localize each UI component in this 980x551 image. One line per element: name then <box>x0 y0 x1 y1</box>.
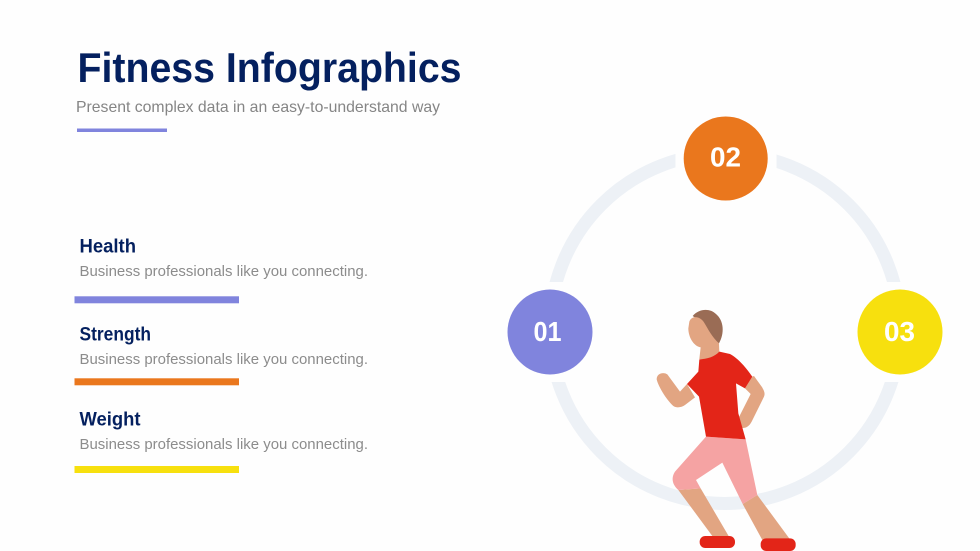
runner figure <box>657 310 796 551</box>
description: health: Business professionals like you connecting. <box>80 263 368 280</box>
list item: weight <box>74 410 368 473</box>
badge 02: 02 <box>710 142 741 173</box>
bar: weight <box>74 466 239 473</box>
bar: strength <box>74 378 239 385</box>
ring segments <box>550 154 900 504</box>
title underline <box>77 128 167 132</box>
badge 01 <box>508 290 592 374</box>
description: strength: Business professionals like you connecting. <box>80 351 368 368</box>
heading: health: Health <box>80 236 136 258</box>
figure: shoes <box>700 536 796 551</box>
figure: shorts <box>673 437 757 504</box>
figure: right leg <box>743 495 790 540</box>
figure: back arm <box>737 376 765 428</box>
bar: health <box>74 296 239 303</box>
title: Fitness Infographics <box>78 44 462 91</box>
badge 03 <box>858 290 942 374</box>
badge 01: 01 <box>534 316 562 347</box>
figure: hair <box>693 310 723 343</box>
heading: weight: Weight <box>80 410 141 430</box>
badge 02 <box>684 116 768 200</box>
badge 03: 03 <box>884 316 915 347</box>
figure: face and neck <box>688 317 719 359</box>
list item: health <box>74 236 368 303</box>
subtitle: Present complex data in an easy-to-understand way <box>76 99 440 116</box>
figure: shirt <box>687 352 752 439</box>
figure: left leg <box>678 488 729 537</box>
figure: front arm <box>657 373 695 407</box>
description: weight: Business professionals like you connecting. <box>80 436 368 453</box>
list item: strength <box>74 324 368 385</box>
heading: strength: Strength <box>80 324 151 346</box>
